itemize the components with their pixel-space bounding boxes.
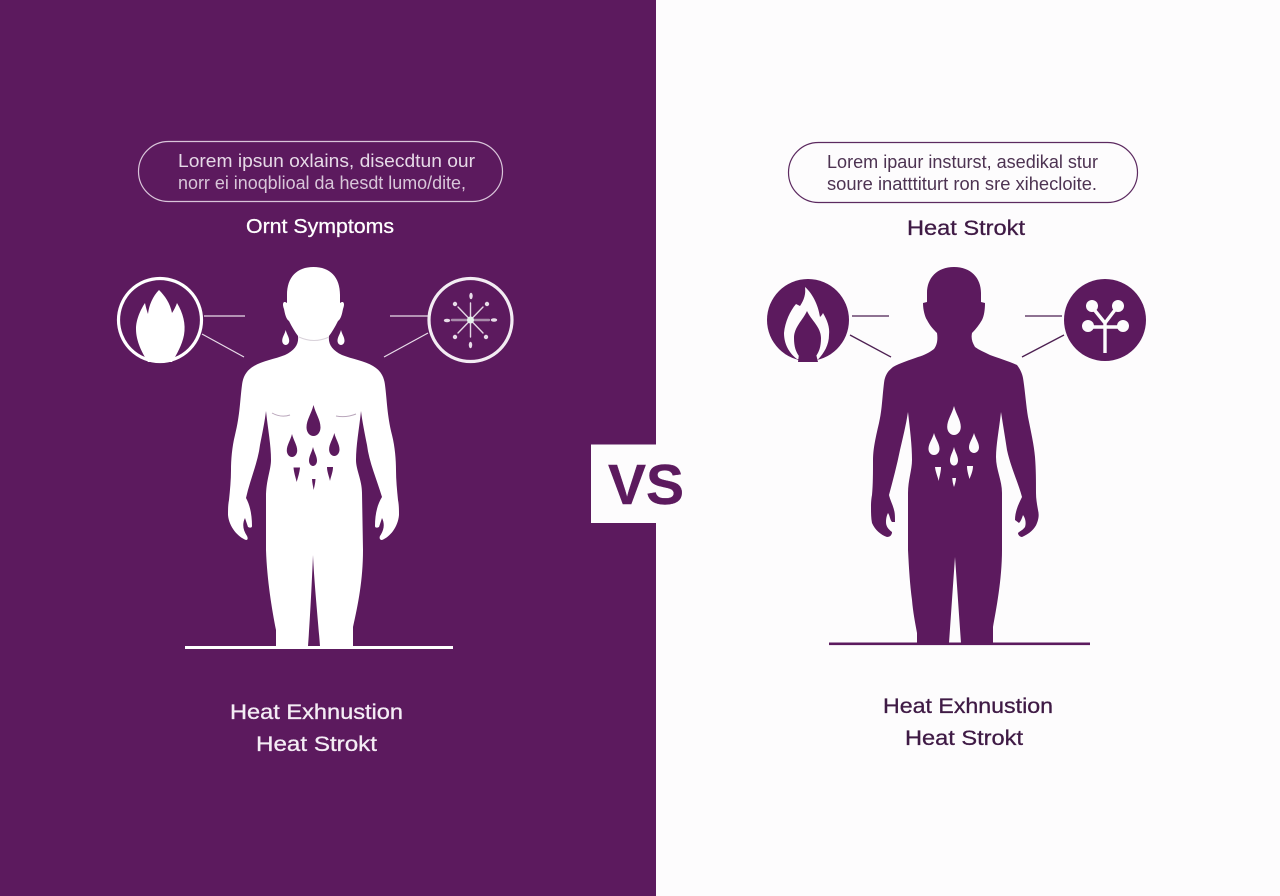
body sweat drops bbox=[287, 405, 340, 490]
ground line: right bbox=[829, 642, 1090, 645]
caption: left: Heat Exhnustion bbox=[230, 701, 403, 724]
caption: right: Heat Exhnustion bbox=[883, 695, 1053, 718]
icon: flame with drop bbox=[767, 279, 849, 362]
panel: left, heat exhaustion bbox=[0, 0, 656, 896]
heading: left: Ornt Symptoms bbox=[246, 216, 394, 238]
description pill: left: norr ei inoqblioal da hesdt lumo/dite, bbox=[178, 173, 466, 193]
caption: right bbox=[883, 695, 1053, 750]
icon: flame in ring bbox=[118, 278, 202, 362]
description pill: right: Lorem ipaur insturst, asedikal stur bbox=[827, 152, 1098, 172]
description pill: left bbox=[138, 142, 502, 202]
icon: radiating star in ring bbox=[429, 278, 512, 362]
icon: branching tree bbox=[1064, 279, 1146, 361]
description pill: right bbox=[788, 142, 1138, 202]
body silhouette: left bbox=[228, 267, 399, 646]
connector lines: flame to body bbox=[850, 316, 891, 357]
description pill: left: Lorem ipsun oxlains, disecdtun our bbox=[178, 151, 475, 171]
body sweat drops bbox=[928, 406, 979, 487]
description pill: right: soure inatttiturt ron sre xihecloite. bbox=[827, 174, 1097, 194]
caption: left: Heat Strokt bbox=[256, 733, 377, 756]
connector lines: star to body bbox=[384, 316, 428, 357]
sweat drops beside the head bbox=[282, 330, 344, 345]
collar and chest lines bbox=[272, 337, 356, 417]
connector lines: flame to body bbox=[202, 316, 245, 357]
connector lines: tree to body bbox=[1022, 316, 1064, 357]
panel: right, heat stroke bbox=[656, 0, 1280, 896]
VS badge bbox=[591, 444, 684, 523]
caption: left bbox=[230, 701, 403, 756]
ground line: left bbox=[185, 646, 453, 649]
caption: right: Heat Strokt bbox=[905, 727, 1023, 750]
VS badge: VS bbox=[608, 453, 684, 517]
heading: right: Heat Strokt bbox=[907, 217, 1025, 240]
body silhouette: right bbox=[871, 267, 1039, 643]
